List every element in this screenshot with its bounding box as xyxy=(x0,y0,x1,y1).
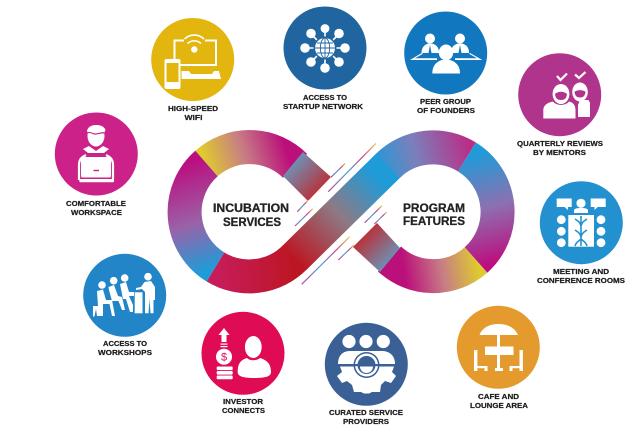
segment: right side of right loop xyxy=(467,157,498,260)
icon: person at a laptop xyxy=(79,125,114,182)
label xyxy=(168,104,219,122)
label xyxy=(98,339,152,357)
accent streaks xyxy=(295,143,387,284)
badge xyxy=(540,181,623,264)
heading: incubation services: SERVICES xyxy=(223,215,281,229)
label: QUARTERLY REVIEWS xyxy=(517,139,603,148)
segment: top of right loop xyxy=(388,147,467,166)
item: investor connects xyxy=(202,312,284,415)
label: PEER GROUP xyxy=(420,97,471,106)
segment: bottom of left loop xyxy=(216,257,295,276)
label: CAFE AND xyxy=(478,392,520,401)
item: cafe and lounge area xyxy=(457,306,540,410)
segment: bottom of right loop xyxy=(390,259,476,276)
icon: three people over a gear xyxy=(337,335,396,394)
heading: program features: PROGRAM xyxy=(403,201,465,215)
heading: incubation services: INCUBATION xyxy=(213,201,289,215)
label: LOUNGE AREA xyxy=(470,401,529,410)
icon: two mentors with check marks xyxy=(543,72,590,118)
label: MEETING AND xyxy=(553,267,610,276)
label xyxy=(66,199,126,217)
label: ACCESS TO xyxy=(303,93,347,102)
heading: program features xyxy=(403,201,465,228)
label xyxy=(517,139,603,157)
label: INVESTOR xyxy=(223,397,264,406)
label: BY MENTORS xyxy=(533,148,586,157)
label: WORKSPACE xyxy=(71,208,122,217)
icon: three people at a table xyxy=(410,34,482,74)
segment: upper-left crossing piece xyxy=(283,152,331,201)
badge xyxy=(457,306,540,389)
badge xyxy=(83,254,166,337)
item: comfortable workspace xyxy=(55,112,138,217)
segment: main diagonal band xyxy=(294,165,388,258)
segment: top of left loop xyxy=(206,147,295,166)
item: access to workshops xyxy=(83,254,166,357)
label xyxy=(537,267,625,285)
label: HIGH-SPEED xyxy=(168,104,219,113)
label: OF FOUNDERS xyxy=(417,106,475,115)
label xyxy=(329,408,403,426)
badge xyxy=(518,53,601,136)
icon: table with umbrella and chairs xyxy=(474,324,523,371)
label xyxy=(283,93,364,111)
icon: investor with coin stack: $ xyxy=(221,352,227,364)
icon: conference table xyxy=(557,198,606,247)
badge xyxy=(55,112,138,196)
heading: program features: FEATURES xyxy=(403,214,465,228)
icon: globe with network nodes xyxy=(300,24,350,73)
label: ACCESS TO xyxy=(103,339,147,348)
label: COMFORTABLE xyxy=(66,199,126,208)
item: meeting and conference rooms xyxy=(537,181,625,285)
icon: laptop, phone and wifi xyxy=(164,35,221,89)
badge xyxy=(325,323,408,406)
label: CURATED SERVICE xyxy=(329,408,403,417)
item: peer group of founders xyxy=(404,12,487,115)
heading: incubation services xyxy=(213,201,289,229)
label: WORKSHOPS xyxy=(98,348,152,357)
badge xyxy=(284,6,366,90)
badge xyxy=(151,18,234,101)
badge xyxy=(202,312,284,395)
item: high-speed wifi xyxy=(151,18,234,122)
label: CONNECTS xyxy=(222,406,265,415)
segment: lower-right crossing piece xyxy=(353,223,400,272)
item: curated service providers xyxy=(325,323,408,426)
label: WIFI xyxy=(184,113,202,122)
segment: left side of left loop xyxy=(185,164,216,267)
item: quarterly reviews by mentors xyxy=(517,53,603,157)
badge xyxy=(404,12,487,94)
infinity loop xyxy=(185,147,498,276)
label: PROVIDERS xyxy=(343,417,389,426)
item: access to startup network xyxy=(283,6,366,111)
icon: audience and speaker xyxy=(93,273,155,316)
label xyxy=(470,392,529,410)
label: STARTUP NETWORK xyxy=(283,102,364,111)
label xyxy=(222,397,265,415)
label xyxy=(417,97,475,115)
label: CONFERENCE ROOMS xyxy=(537,276,625,285)
